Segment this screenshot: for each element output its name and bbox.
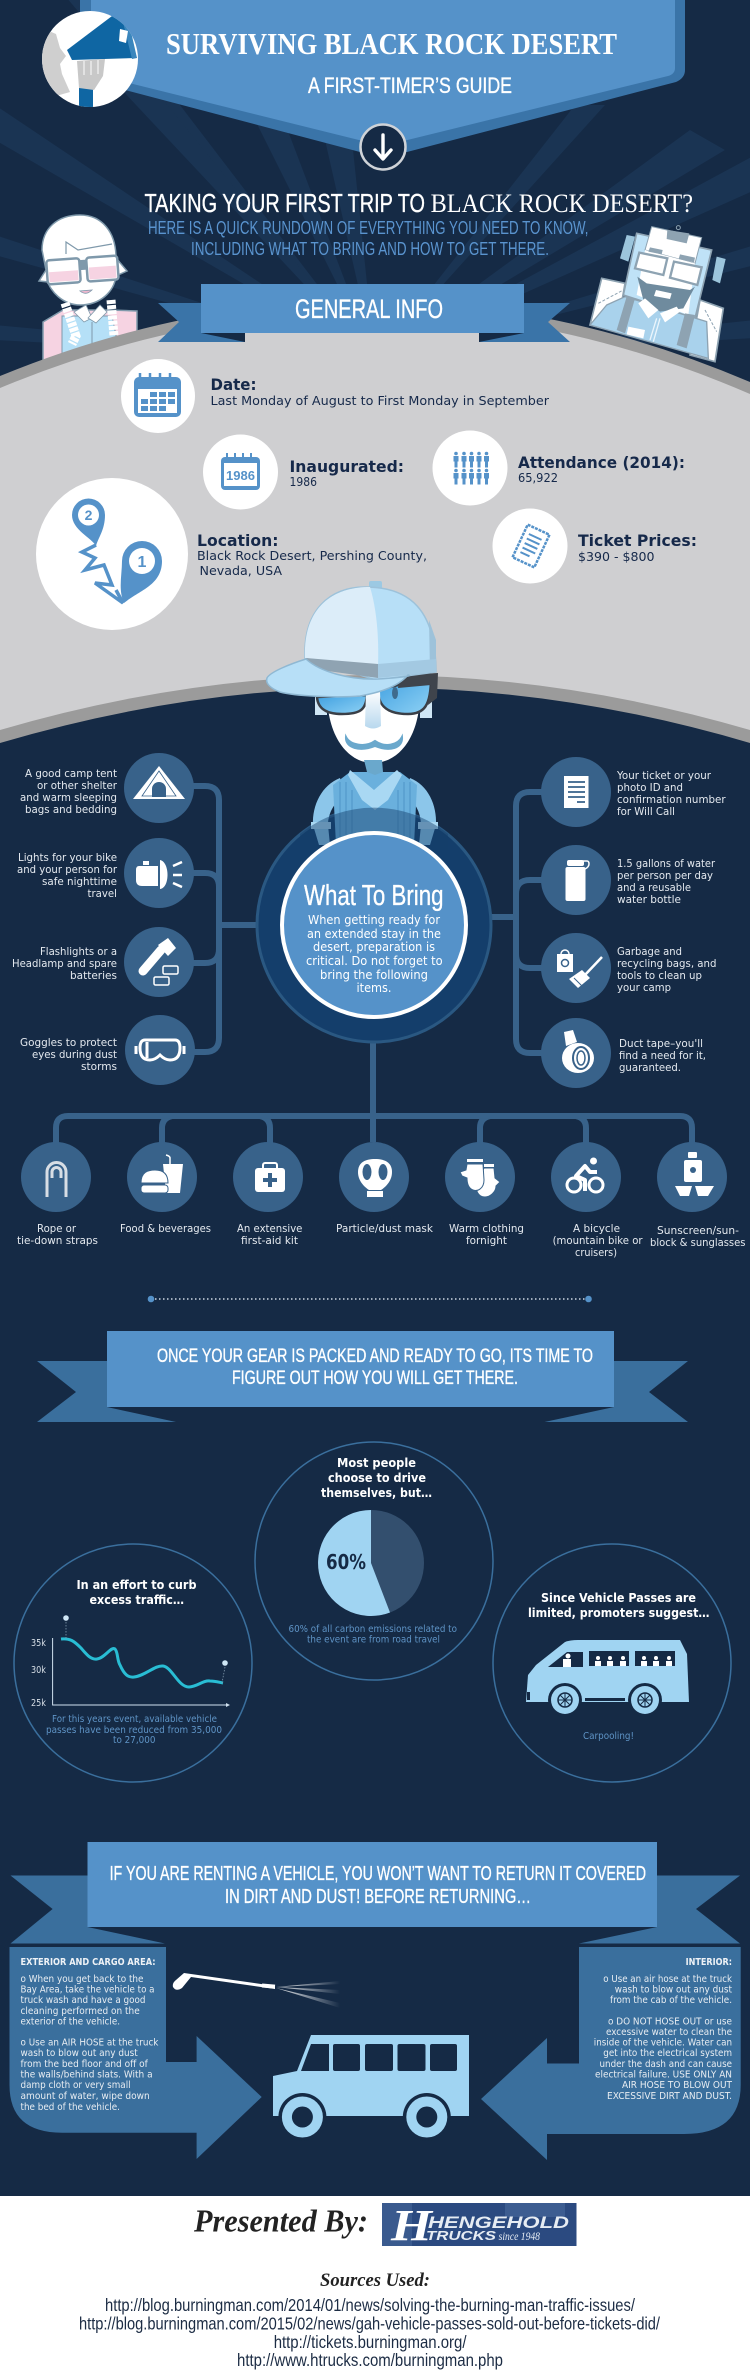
- presented by: Presented By:: [193, 2202, 368, 2238]
- text: intro: When getting ready for: [308, 913, 440, 927]
- icon: water bottle: [566, 860, 589, 901]
- interior text: AIR HOSE TO BLOW OUT: [622, 2080, 732, 2091]
- logo: hengehold trucks: [382, 2201, 576, 2250]
- text: intro: bring the following: [320, 968, 428, 982]
- exterior text: the walls/behind slats. With a: [20, 2070, 153, 2080]
- item: duct tape: [541, 1018, 706, 1088]
- interior text: EXCESSIVE DIRT AND DUST.: [607, 2091, 732, 2102]
- item: duct tape: guaranteed.: [619, 1062, 681, 1074]
- interior text: [594, 1974, 732, 2102]
- item: dust mask: Particle/dust mask: [336, 1223, 434, 1235]
- character: man with helmet: [590, 226, 726, 362]
- background rays: [0, 0, 750, 360]
- glasses: [317, 673, 438, 714]
- icon: rope: [47, 1162, 66, 1197]
- pie: [318, 1510, 424, 1616]
- intro heading: BLACK ROCK DESERT?: [431, 189, 693, 218]
- grey dome: general info section: [0, 300, 750, 745]
- exterior text: damp cloth or very small: [20, 2080, 131, 2091]
- goatee: [364, 760, 383, 775]
- pie heading: choose to drive: [328, 1470, 426, 1485]
- heading: getting there: [157, 1346, 593, 1389]
- info: inaugurated: 1986: [290, 475, 317, 489]
- text: intro: desert, preparation is: [313, 940, 435, 954]
- item: water: water bottle: [617, 894, 681, 906]
- item: rope: [17, 1142, 98, 1247]
- icon: bus: [273, 2035, 469, 2141]
- item: camp tent: A good camp tent: [25, 768, 117, 780]
- dark arc: what to bring section: [0, 675, 750, 1300]
- icon: map pins: [72, 498, 162, 603]
- sources heading: Sources Used:: [320, 2270, 430, 2291]
- exterior text: from the bed floor and off of: [20, 2059, 148, 2070]
- sources list: http://www.htrucks.com/burningman.php: [237, 2350, 503, 2370]
- arrow panel: exterior: [10, 1947, 262, 2159]
- exterior text: truck wash and have a good: [20, 1995, 146, 2006]
- exterior text: the bed of the vehicle.: [20, 2102, 120, 2113]
- chart: 25k: [31, 1698, 46, 1709]
- character: hipster with cap: [267, 581, 438, 845]
- interior text: under the dash and can cause: [600, 2059, 732, 2070]
- icon: map pins: 2: [85, 507, 93, 523]
- item: first aid: An extensive: [237, 1223, 302, 1235]
- icon: mittens: [460, 1159, 500, 1197]
- item: garbage bags: [541, 933, 716, 1003]
- item: food: [120, 1142, 211, 1235]
- item: warm clothing: [445, 1142, 524, 1247]
- item: food: Food & beverages: [120, 1223, 211, 1235]
- item: bicycle: cruisers): [575, 1247, 617, 1259]
- item: bicycle: A bicycle: [573, 1223, 620, 1235]
- ears: [315, 697, 432, 718]
- pie caption: 60% of all carbon emissions related to: [288, 1624, 457, 1635]
- connector lines: [56, 786, 692, 1146]
- interior text: o DO NOT HOSE OUT or use: [608, 2016, 732, 2028]
- item: bicycle: [551, 1142, 643, 1259]
- item: water: 1.5 gallons of water: [617, 858, 716, 870]
- item: duct tape: find a need for it,: [619, 1050, 706, 1062]
- item: ticket or id: for Will Call: [617, 806, 675, 818]
- intro text: HERE IS A QUICK RUNDOWN OF EVERYTHING YOU NEED TO KNOW,: [148, 218, 588, 238]
- item: camp tent: [20, 753, 194, 823]
- exterior text: wash to blow out any dust: [20, 2048, 138, 2059]
- item: bike lights: Lights for your bike: [18, 852, 117, 864]
- title: SURVIVING BLACK ROCK DESERT: [166, 26, 617, 61]
- chart caption: passes have been reduced from 35,000: [46, 1725, 222, 1736]
- icon: people: [454, 452, 489, 484]
- ribbon: general info: [158, 284, 570, 342]
- item: warm clothing: fornight: [466, 1235, 507, 1247]
- heading: getting there: ONCE YOUR GEAR IS PACKED AND READY TO GO, ITS TIME TO: [157, 1346, 593, 1367]
- icon: bag and brush: [557, 950, 602, 988]
- exterior text: o When you get back to the: [20, 1974, 144, 1985]
- item: bike lights: [17, 838, 194, 908]
- item: sunscreen: [650, 1142, 746, 1249]
- heading: returning vehicle: [110, 1863, 646, 1908]
- pie: 60%: [326, 1550, 366, 1574]
- ribbon: getting there: [37, 1331, 688, 1422]
- info: ticket prices: $390 - $800: [578, 550, 654, 564]
- item: water: [541, 845, 716, 915]
- icon: gas mask: [358, 1159, 392, 1197]
- text: intro: [306, 913, 443, 995]
- icon: map pins: 1: [138, 554, 147, 571]
- chart: 30k: [31, 1665, 46, 1676]
- chart heading: In an effort to curb: [76, 1577, 197, 1592]
- item: garbage bags: tools to clean up: [617, 970, 702, 982]
- sources list: http://blog.burningman.com/2014/01/news/solving-the-burning-man-traffic-issues/: [105, 2295, 635, 2315]
- icon: van: [526, 1640, 689, 1717]
- icon: receipt: [564, 776, 588, 808]
- icon: sunscreen and sunglasses: [675, 1152, 714, 1196]
- info: ticket prices: Ticket Prices:: [578, 531, 697, 550]
- item: first aid: first-aid kit: [241, 1235, 298, 1247]
- arrow panel: interior: [481, 1947, 741, 2160]
- info: attendance: 65,922: [518, 471, 558, 485]
- item: first aid: [233, 1142, 303, 1247]
- info: date: Last Monday of August to First Monday in September: [210, 394, 549, 408]
- item: garbage bags: your camp: [617, 982, 671, 994]
- exterior text: cleaning performed on the: [20, 2006, 140, 2017]
- item: sunscreen: Sunscreen/sun-: [657, 1225, 739, 1237]
- intro text: [148, 218, 588, 259]
- icon: down arrow badge: [360, 124, 406, 170]
- sources list: http://tickets.burningman.org/: [274, 2332, 467, 2352]
- item: water: per person per day: [617, 870, 713, 882]
- heading: getting there: FIGURE OUT HOW YOU WILL GET THERE.: [232, 1368, 518, 1389]
- icon: tape roll: [562, 1030, 594, 1073]
- chart caption: [46, 1714, 222, 1746]
- item: ticket or id: photo ID and: [617, 782, 683, 794]
- exterior text: Bay Area, take the vehicle to a: [20, 1984, 154, 1996]
- item: camp tent: and warm sleeping: [20, 792, 117, 804]
- interior text: excessive water to clean the: [606, 2027, 732, 2038]
- item: sunscreen: block & sunglasses: [650, 1237, 746, 1249]
- item: dust mask: [336, 1142, 434, 1235]
- item: goggles: storms: [81, 1061, 117, 1073]
- info: location: Black Rock Desert, Pershing County,: [197, 549, 427, 563]
- icon: 1986 calendar: [221, 453, 260, 490]
- icon: pressure washer: [173, 1973, 340, 2008]
- item: ticket or id: confirmation number: [617, 794, 726, 806]
- item: rope: tie-down straps: [17, 1235, 98, 1247]
- logo: hengehold trucks: HENGEHOLD: [428, 2213, 569, 2232]
- subtitle: A FIRST-TIMER’S GUIDE: [308, 73, 512, 98]
- moustache: [346, 737, 402, 749]
- chart: 35k: [31, 1638, 46, 1649]
- exterior text: exterior of the vehicle.: [20, 2016, 120, 2028]
- pie heading: [321, 1455, 432, 1500]
- icon: goggles: [136, 1040, 184, 1060]
- item: garbage bags: Garbage and: [617, 946, 682, 958]
- body: [311, 770, 438, 845]
- item: camp tent: bags and bedding: [25, 804, 117, 816]
- text: intro: items.: [356, 981, 392, 995]
- info: location: [36, 478, 427, 630]
- item: bike lights: safe nighttime: [42, 876, 117, 888]
- footer background: [0, 2196, 750, 2376]
- panel: carpooling: Carpooling!: [583, 1731, 634, 1742]
- info: date: [121, 359, 549, 433]
- logo: hengehold trucks: H: [390, 2201, 434, 2250]
- info: location: Location:: [197, 531, 278, 550]
- item: water: and a reusable: [617, 882, 691, 894]
- info: attendance: [432, 430, 685, 506]
- intro heading: [144, 188, 693, 218]
- info: location: Nevada, USA: [200, 564, 283, 578]
- interior text: from the cab of the vehicle.: [610, 1995, 732, 2006]
- item: bike lights: travel: [88, 888, 117, 900]
- item: flashlight: Headlamp and spare: [12, 958, 117, 970]
- heading: what to bring: What To Bring: [304, 880, 444, 912]
- nose: [365, 690, 381, 728]
- icon: flashlight and batteries: [143, 938, 178, 985]
- logo: hengehold trucks: TRUCKS: [426, 2228, 496, 2243]
- panel: line chart: [14, 1544, 252, 1782]
- item: rope: Rope or: [37, 1223, 77, 1235]
- item: goggles: [20, 1015, 195, 1085]
- icon: 1986 calendar: 1986: [226, 468, 255, 483]
- item: flashlight: [12, 927, 194, 997]
- icon: calendar: [134, 373, 181, 417]
- item: ticket or id: [541, 757, 726, 827]
- interior text: wash to blow out any dust: [615, 1984, 732, 1996]
- logo: hengehold trucks: since 1948: [499, 2229, 540, 2243]
- panel: carpooling: [493, 1544, 731, 1782]
- exterior heading: EXTERIOR AND CARGO AREA:: [20, 1957, 156, 1968]
- panel: pie chart: [255, 1442, 493, 1680]
- carpool heading: [528, 1590, 710, 1620]
- ribbon: returning vehicle: [10, 1842, 740, 1944]
- item: duct tape: Duct tape–you'll: [619, 1038, 703, 1050]
- item: ticket or id: Your ticket or your: [616, 770, 712, 782]
- item: flashlight: batteries: [70, 970, 117, 982]
- item: warm clothing: Warm clothing: [449, 1223, 524, 1235]
- interior text: inside of the vehicle. Water can: [594, 2038, 732, 2048]
- intro heading: TAKING YOUR FIRST TRIP TO: [144, 188, 425, 218]
- item: bike lights: and your person for: [17, 864, 118, 876]
- info: inaugurated: Inaugurated:: [290, 457, 404, 476]
- carpool heading: limited, promoters suggest…: [528, 1605, 710, 1620]
- heading: general info: GENERAL INFO: [295, 294, 443, 324]
- face: [327, 695, 420, 763]
- item: garbage bags: recycling bags, and: [617, 958, 716, 970]
- item: camp tent: or other shelter: [37, 780, 118, 792]
- heading: returning vehicle: IN DIRT AND DUST! BEFORE RETURNING…: [225, 1886, 531, 1908]
- info: attendance: Attendance (2014):: [518, 453, 685, 472]
- text: intro: an extended stay in the: [307, 927, 441, 941]
- pie heading: Most people: [337, 1455, 416, 1470]
- cap: [267, 581, 436, 697]
- interior text: electrical failure. USE ONLY AN: [595, 2070, 732, 2080]
- panel: what to bring: [282, 833, 466, 1017]
- info: inaugurated: [203, 434, 404, 510]
- icon: first aid kit: [255, 1163, 285, 1192]
- icon: bike light: [136, 860, 182, 889]
- icon: cyclist: [567, 1158, 603, 1192]
- dotted divider: [148, 1296, 592, 1302]
- icon: tent: [133, 766, 185, 799]
- item: goggles: eyes during dust: [32, 1049, 117, 1061]
- sources list: [79, 2295, 660, 2370]
- icon: megaphone: [42, 10, 138, 114]
- chart caption: to 27,000: [113, 1735, 156, 1746]
- interior heading: INTERIOR:: [686, 1957, 732, 1968]
- header banner: [80, 0, 685, 152]
- pie heading: themselves, but…: [321, 1485, 432, 1500]
- carpool heading: Since Vehicle Passes are: [541, 1590, 696, 1605]
- pie caption: the event are from road travel: [307, 1634, 440, 1646]
- exterior text: amount of water, wipe down: [20, 2091, 150, 2102]
- overlay ring tint: [300, 808, 448, 850]
- pie caption: [288, 1624, 457, 1646]
- chart: [31, 1615, 230, 1709]
- item: bicycle: (mountain bike or: [553, 1235, 643, 1247]
- intro text: INCLUDING WHAT TO BRING AND HOW TO GET THERE.: [191, 239, 549, 259]
- character: woman with goggles: [39, 215, 137, 365]
- interior text: get into the electrical system: [603, 2048, 732, 2059]
- item: flashlight: Flashlights or a: [40, 946, 117, 958]
- item: goggles: Goggles to protect: [20, 1037, 117, 1049]
- text: intro: critical. Do not forget to: [306, 954, 443, 968]
- chart caption: For this years event, available vehicle: [52, 1714, 217, 1725]
- info: ticket prices: [492, 508, 697, 584]
- exterior text: [20, 1974, 159, 2113]
- info: date: Date:: [210, 375, 256, 394]
- chart heading: excess traffic…: [90, 1592, 184, 1607]
- exterior text: o Use an AIR HOSE at the truck: [20, 2038, 159, 2048]
- icon: ticket: [513, 525, 549, 567]
- interior text: o Use an air hose at the truck: [603, 1974, 732, 1985]
- chart heading: [76, 1577, 197, 1607]
- outer ring: [257, 808, 491, 1042]
- icon: burger and drink: [141, 1155, 183, 1193]
